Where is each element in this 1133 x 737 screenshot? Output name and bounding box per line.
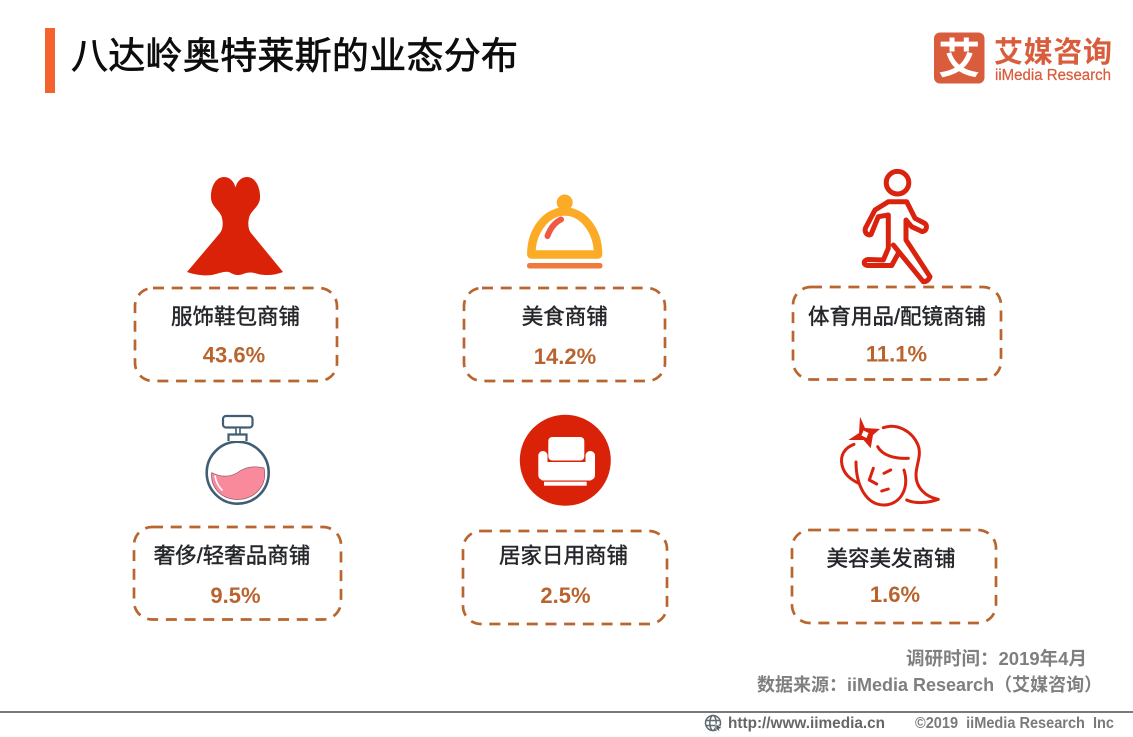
panel: home goods shops [463,415,667,624]
website url: http://www.iimedia.cn [728,715,885,732]
panel: clothing shops [135,177,337,381]
logo chinese name: 艾媒咨询 [994,36,1112,69]
icon: perfume bottle [207,416,269,504]
value: 2.5% [540,583,591,608]
value: 14.2% [534,344,596,369]
title accent bar [45,28,55,93]
footer divider [0,711,1133,713]
panel: sports and eyewear shops [793,171,1001,380]
logo english name: iiMedia Research [995,67,1111,84]
logo mark: 艾 [938,36,980,82]
label: 体育用品/配镜商铺 [808,305,986,329]
logo: iiMedia Research [934,32,1112,84]
icon: walking person [864,171,930,282]
panel: luxury shops [134,416,341,620]
label: 居家日用商铺 [499,544,628,568]
label: 美食商铺 [522,305,608,329]
icon: food cloche [527,194,602,268]
label: 服饰鞋包商铺 [171,305,300,329]
label: 美容美发商铺 [826,547,956,571]
icon: sofa in red circle [520,415,611,506]
value: 9.5% [210,583,261,608]
icon: girl with star hairpin [842,417,938,505]
panel: food shops [464,194,665,381]
dashed card [792,530,996,623]
dashed card [793,287,1001,380]
copyright: ©2019 iiMedia Research Inc [915,715,1114,732]
dashed card [134,527,341,620]
data source note: 数据来源：iiMedia Research（艾媒咨询） [757,675,1102,695]
icon: red dress [187,177,283,275]
value: 43.6% [203,342,265,368]
dashed card [464,288,665,381]
dashed card [135,288,337,381]
value: 1.6% [870,582,920,607]
survey date note: 调研时间：2019年4月 [906,648,1087,669]
label: 奢侈/轻奢品商铺 [154,544,310,568]
value: 11.1% [866,342,927,366]
dashed card [463,531,667,624]
panel: beauty and hair shops [792,417,996,623]
title: 八达岭奥特莱斯的业态分布 [71,36,518,76]
icon: globe with cursor [706,716,722,732]
